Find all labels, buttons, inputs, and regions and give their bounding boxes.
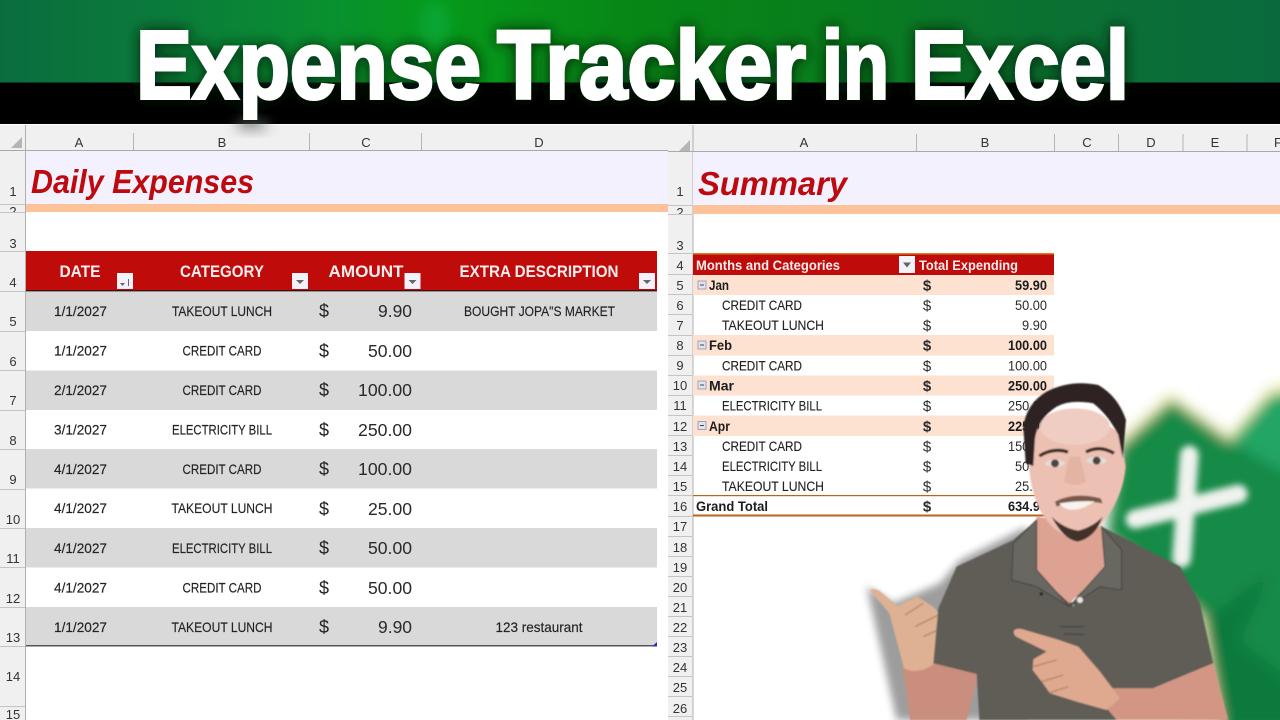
table data rows: 25.00	[368, 499, 412, 519]
right row headers: 14	[673, 459, 687, 474]
left row headers: 3	[9, 236, 17, 251]
left row headers: 6	[9, 354, 17, 369]
filter buttons	[117, 273, 655, 289]
table data rows: CREDIT CARD	[182, 382, 262, 398]
headline: Tracker	[497, 10, 806, 120]
right row headers: 12	[673, 419, 687, 434]
shirt collar	[1012, 520, 1122, 635]
pivot values: 9.90	[1022, 318, 1047, 333]
table data rows: 250.00	[358, 420, 412, 440]
left column headers: C	[361, 135, 371, 150]
pivot values: 50.00	[1015, 298, 1047, 313]
left row headers	[0, 125, 26, 720]
left row headers: 4	[9, 275, 17, 290]
table data rows: 4/1/2027	[54, 540, 107, 556]
smile	[1059, 501, 1095, 510]
pivot values: 225.00	[1008, 419, 1047, 434]
table data rows: $	[319, 341, 329, 361]
right column headers: B	[981, 135, 989, 150]
table data rows: 1/1/2027	[54, 619, 107, 635]
title band: Summary: Summary	[698, 165, 849, 202]
right row headers: 16	[673, 499, 687, 514]
right row headers: 2	[676, 205, 684, 220]
pivot row labels: Mar	[709, 378, 735, 394]
table data rows: 50.00	[368, 538, 412, 558]
table data rows: CREDIT CARD	[182, 461, 262, 477]
presenter photo illustration	[867, 383, 1228, 720]
table data rows: 50.00	[368, 578, 412, 598]
table data rows: $	[319, 459, 329, 479]
right row headers: 21	[673, 600, 687, 615]
left row headers: 1	[9, 184, 17, 199]
pivot row labels: TAKEOUT LUNCH	[722, 478, 824, 494]
title band: Daily Expenses: Daily Expenses	[31, 163, 254, 200]
left column headers: D	[534, 135, 544, 150]
table data rows: $	[319, 420, 329, 440]
neck	[1037, 517, 1105, 603]
right row headers: 6	[676, 298, 684, 313]
pivot values: $	[923, 418, 932, 436]
pivot values: $	[923, 318, 932, 334]
left column headers	[0, 125, 668, 151]
pivot header: Total Expending	[919, 257, 1018, 273]
table data rows: TAKEOUT LUNCH	[172, 303, 272, 319]
table data rows: ELECTRICITY BILL	[172, 540, 272, 556]
icon: blurred Excel logo	[1107, 382, 1280, 720]
pivot values: $	[923, 338, 932, 354]
left column headers: B	[218, 135, 226, 150]
left row headers: 5	[9, 314, 17, 329]
pivot row labels: ELECTRICITY BILL	[722, 458, 822, 474]
pivot values: $	[923, 278, 932, 294]
pivot row labels: ELECTRICITY BILL	[722, 398, 822, 414]
right column headers: E	[1211, 135, 1220, 150]
pivot values: 59.90	[1015, 278, 1047, 293]
title banner	[0, 0, 1280, 132]
pivot header	[693, 253, 1054, 275]
table data rows: CREDIT CARD	[182, 580, 262, 596]
zebra row backgrounds	[26, 292, 657, 646]
pivot values: $	[923, 458, 932, 476]
left column headers: A	[75, 135, 84, 150]
title band: Daily Expenses	[26, 151, 668, 212]
headline: Expense	[136, 10, 481, 120]
table data rows: $	[319, 301, 329, 321]
right row headers	[668, 125, 694, 720]
table data rows: $	[319, 499, 329, 519]
pivot values: 250.00	[1008, 398, 1047, 414]
pivot row labels: CREDIT CARD	[722, 297, 802, 313]
table data rows: 100.00	[358, 380, 412, 400]
table data rows: TAKEOUT LUNCH	[172, 500, 272, 516]
right column headers: C	[1082, 135, 1092, 150]
table data rows: TAKEOUT LUNCH	[172, 619, 272, 635]
headline	[136, 10, 1129, 120]
table data rows: 4/1/2027	[54, 580, 107, 596]
table data rows: 1/1/2027	[54, 342, 107, 358]
pivot values: $	[923, 438, 932, 456]
left row headers: 2	[9, 204, 17, 219]
right row headers: 17	[673, 519, 687, 534]
title band: Summary	[693, 152, 1280, 214]
right row headers: 22	[673, 620, 687, 635]
table data rows: 4/1/2027	[54, 461, 107, 477]
pivot row labels: Grand Total	[696, 498, 768, 514]
eyes	[1045, 457, 1107, 467]
pivot values	[923, 278, 1047, 516]
pivot row labels: CREDIT CARD	[722, 358, 802, 374]
right row headers: 15	[673, 479, 687, 494]
right row headers: 18	[673, 540, 687, 555]
left row headers: 13	[6, 630, 20, 645]
left row headers: 12	[6, 591, 20, 606]
left spreadsheet panel: Daily Expenses	[0, 124, 668, 720]
right column headers: A	[800, 135, 809, 150]
right column headers	[668, 125, 1280, 152]
pivot row labels: CREDIT CARD	[722, 438, 802, 454]
right row headers: 13	[673, 439, 687, 454]
hair	[1023, 383, 1126, 466]
table data rows: $	[319, 538, 329, 558]
pivot table	[693, 253, 1054, 516]
table header row: CATEGORY	[180, 263, 264, 281]
pivot values: 100.00	[1008, 338, 1047, 353]
pivot row labels: Feb	[709, 337, 732, 353]
soft shadow behind presenter	[867, 527, 1027, 720]
face	[1029, 408, 1126, 542]
right row headers: 8	[676, 338, 684, 353]
table header row: EXTRA DESCRIPTION	[460, 263, 618, 281]
pivot row labels: TAKEOUT LUNCH	[722, 317, 824, 333]
right row headers: 1	[676, 184, 684, 199]
table data rows: BOUGHT JOPA"S MARKET	[464, 303, 615, 319]
right row headers: 24	[673, 660, 687, 675]
table data rows: 4/1/2027	[54, 500, 107, 516]
table data rows: $	[319, 380, 329, 400]
left row headers: 7	[9, 393, 17, 408]
right column headers: D	[1146, 135, 1156, 150]
right forearm	[1090, 663, 1228, 720]
pivot values: 25.00	[1015, 479, 1047, 494]
pivot row labels: Jan	[709, 277, 729, 293]
right row headers: 7	[676, 318, 684, 333]
headline: in	[822, 10, 889, 120]
pivot values: 150.00	[1008, 439, 1047, 454]
right row headers: 23	[673, 640, 687, 655]
polo shirt	[933, 520, 1213, 720]
pointing hand	[1014, 629, 1120, 710]
month band backgrounds	[693, 275, 1054, 436]
pivot row labels: Apr	[709, 418, 730, 434]
right spreadsheet panel: Summary	[668, 124, 1280, 720]
left row headers: 10	[6, 512, 20, 527]
pivot values: 50.00	[1015, 459, 1047, 474]
right row headers: 20	[673, 580, 687, 595]
pivot values: $	[923, 378, 932, 395]
table data rows	[26, 301, 657, 646]
left row headers: 9	[9, 472, 17, 487]
right row headers: 3	[676, 238, 684, 253]
pivot row labels	[696, 277, 824, 514]
table data rows: $	[319, 578, 329, 598]
beard and moustache	[1055, 496, 1103, 507]
right row headers: 9	[676, 358, 684, 373]
pivot values: $	[923, 498, 932, 516]
pivot values: $	[923, 398, 932, 415]
right row headers: 10	[673, 378, 687, 393]
headline: Excel	[911, 10, 1129, 120]
pivot values: 100.00	[1008, 358, 1047, 374]
table header row	[26, 251, 657, 291]
table data rows: 3/1/2027	[54, 422, 107, 438]
pivot header: Months and Categories	[696, 257, 840, 273]
right row headers: 26	[673, 701, 687, 716]
right row headers: 25	[673, 680, 687, 695]
table data rows: 123 restaurant	[496, 619, 583, 635]
table data rows: $	[319, 617, 329, 637]
right row headers: 5	[676, 278, 684, 293]
left row headers: 8	[9, 433, 17, 448]
pivot values: 250.00	[1008, 378, 1047, 394]
pivot values: $	[923, 478, 932, 496]
left row headers: 14	[6, 669, 20, 684]
table data rows: 2/1/2027	[54, 382, 107, 398]
table data rows: CREDIT CARD	[182, 342, 262, 358]
table data rows: 1/1/2027	[54, 303, 107, 319]
green banner background	[0, 0, 1280, 83]
left row headers: 11	[6, 551, 20, 566]
arm with thumb	[870, 589, 978, 720]
right row headers: 4	[676, 258, 684, 273]
pivot values: $	[923, 298, 932, 314]
table data rows: 50.00	[368, 341, 412, 361]
right row headers: 19	[673, 560, 687, 575]
table data rows: 100.00	[358, 459, 412, 479]
pivot values: 634.90	[1008, 499, 1047, 514]
pivot values: $	[923, 358, 932, 375]
table data rows: 9.90	[378, 617, 412, 637]
table header row: AMOUNT	[328, 263, 404, 281]
eyebrows	[1039, 449, 1114, 456]
table data rows: ELECTRICITY BILL	[172, 422, 272, 438]
table header row: DATE	[60, 263, 100, 281]
table data rows: 9.90	[378, 301, 412, 321]
right row headers: 11	[673, 398, 687, 413]
